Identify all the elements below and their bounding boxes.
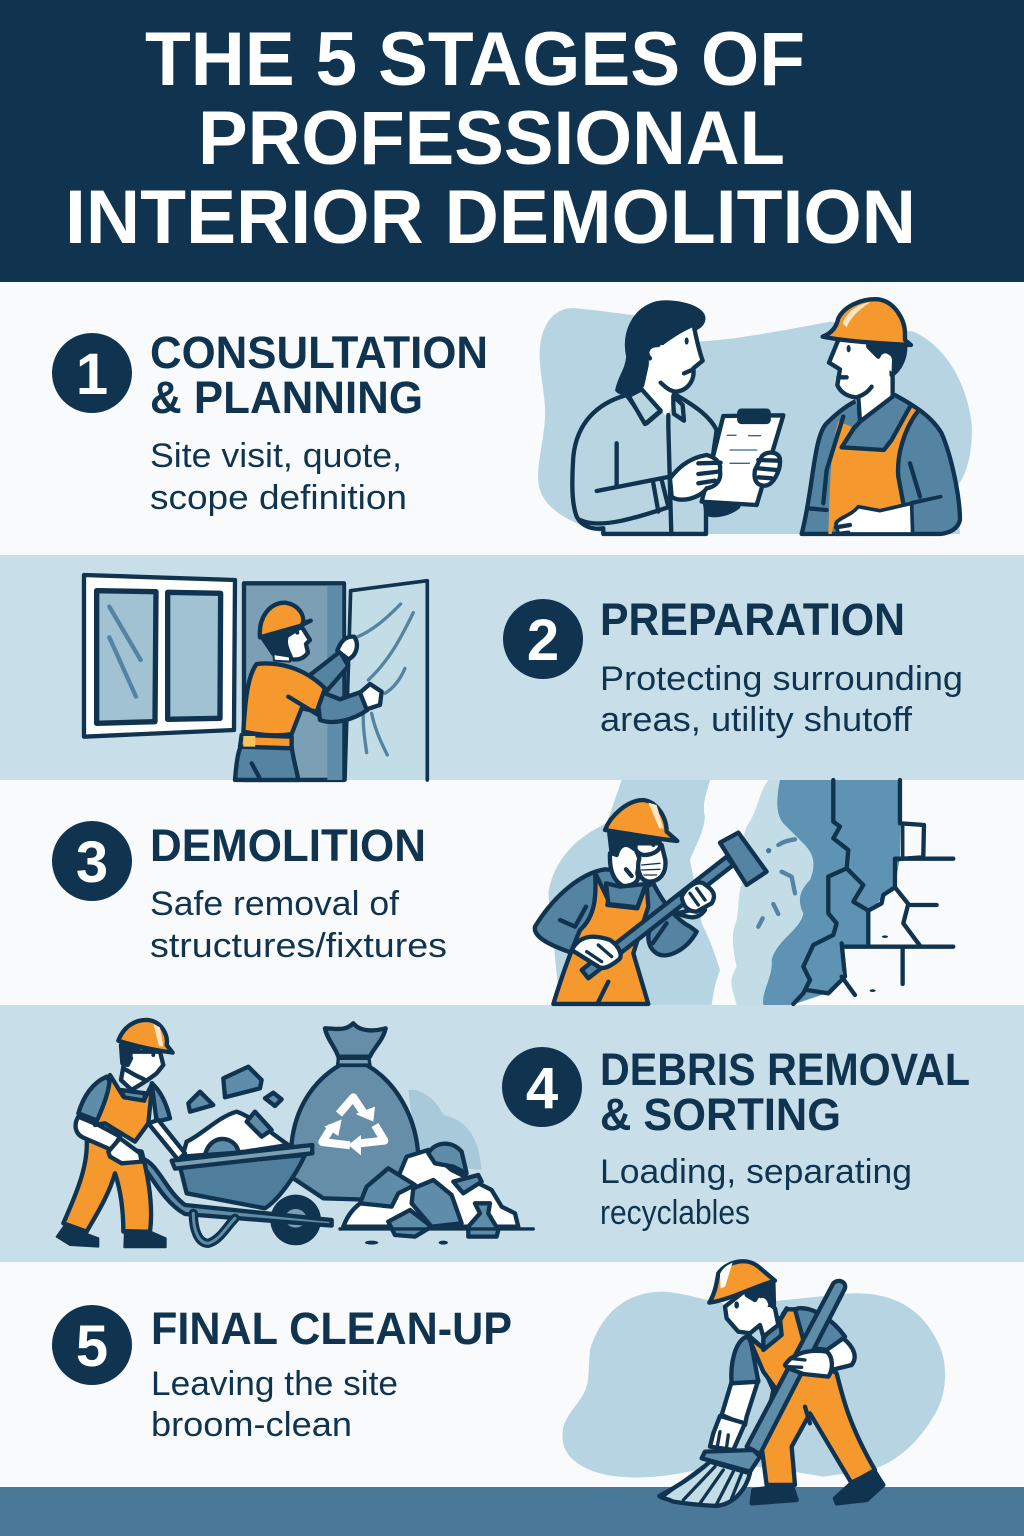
description [150,437,407,517]
description: scope definition [150,479,407,517]
woman [572,302,783,534]
heading: consultation and planning [150,327,488,423]
background plaster shapes [548,780,902,1005]
panel: stage 4 text [502,1044,970,1232]
number badge 4 [502,1047,582,1127]
description: Leaving the site [151,1365,398,1403]
window [84,575,235,737]
wheel [270,1195,321,1245]
panel: stage 2 illustration - worker taping plastic sheet over door [84,575,427,780]
description: areas, utility shutoff [600,701,913,739]
title: PROFESSIONAL [198,96,785,181]
band: stage 4 background [0,1005,1024,1262]
wheelbarrow [140,1145,332,1243]
contractor [802,299,960,534]
description [600,1153,912,1232]
band: stage 2 background [0,555,1024,780]
description: Loading, separating [600,1153,912,1191]
number badge 5 [52,1305,132,1385]
background blob [563,1292,945,1477]
illustration: client and contractor with clipboard [538,299,972,534]
panel: stage 3 text [52,820,447,965]
heading: consultation and planning: & PLANNING [150,372,423,423]
description: Site visit, quote, [150,437,402,475]
heading: debris removal and sorting: & SORTING [600,1089,841,1140]
wheelbarrow load [182,1112,288,1157]
number badge 1 [52,333,132,413]
recycling symbol [322,1097,384,1155]
worker [57,1020,185,1247]
heading: debris removal and sorting: DEBRIS REMOVAL [600,1044,970,1095]
description: structures/fixtures [150,927,447,965]
background blob [538,308,972,534]
heading: final clean-up: FINAL CLEAN-UP [151,1303,512,1354]
wall cracks and bricks [758,780,953,1004]
title [65,17,916,260]
worker [235,603,382,780]
panel: stage 5 illustration - worker sweeping with broom [563,1261,945,1506]
heading: debris removal and sorting [600,1044,970,1140]
description [600,660,963,739]
worker [535,800,767,1004]
panel: stage 4 illustration - worker with wheelbarrow, recycling bag and rubble [57,1020,533,1247]
description: broom-clean [151,1406,352,1444]
panel: stage 5 text [52,1303,512,1444]
doorway [244,583,344,780]
description: Protecting surrounding [600,660,963,698]
title: INTERIOR DEMOLITION [65,175,916,260]
description [151,1365,398,1444]
header band with title [0,0,1024,282]
panel: stage 3 illustration - worker with sledgehammer at broken wall [535,780,953,1005]
description: Safe removal of [150,885,400,923]
number badge 1: 1 [76,342,108,407]
title: THE 5 STAGES OF [145,17,805,102]
heading: preparation: PREPARATION [600,594,905,645]
recycling bag [292,1023,418,1200]
worker [709,1261,883,1503]
number badge 3 [52,821,132,901]
rubble pile [340,1144,533,1245]
heading: demolition: DEMOLITION [150,820,426,871]
plastic sheet [345,581,427,780]
description [150,885,447,965]
number badge 2 [503,599,583,679]
footer band [0,1487,1024,1536]
broom [659,1450,760,1506]
number badge 2: 2 [527,608,559,673]
number badge 4: 4 [526,1056,558,1121]
flying debris [188,1067,282,1112]
bag shadow [408,1090,482,1170]
number badge 3: 3 [76,830,108,895]
heading: consultation and planning: CONSULTATION [150,327,488,378]
description: recyclables [600,1194,750,1232]
panel: stage 1 text [52,327,488,517]
number badge 5: 5 [76,1314,108,1379]
panel: stage 2 text [503,594,963,739]
